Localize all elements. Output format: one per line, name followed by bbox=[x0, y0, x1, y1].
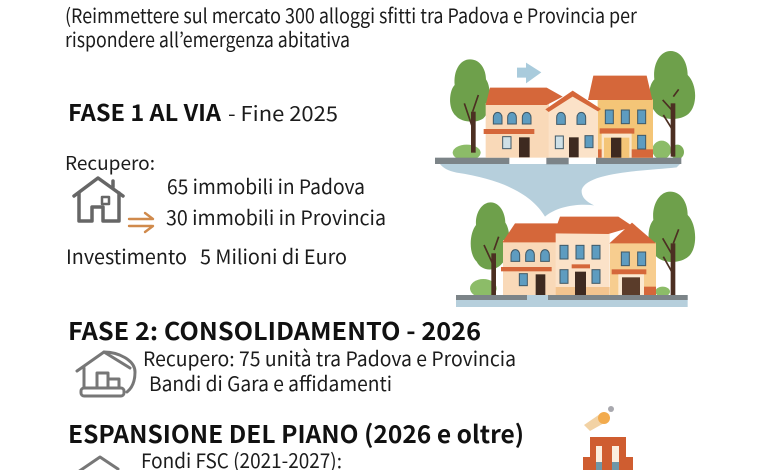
intro text: (Reimmettere sul mercato 300 alloggi sfitti tra Padova e Provincia per bbox=[65, 0, 637, 29]
text: investimento bbox=[66, 241, 347, 270]
icon: building bbox=[583, 437, 633, 470]
icon: coin bbox=[584, 406, 614, 431]
trees bottom bbox=[470, 192, 695, 298]
pavement top bbox=[435, 158, 681, 164]
house top right bbox=[588, 76, 653, 158]
icon: house bbox=[74, 178, 123, 221]
pavement bottom bbox=[456, 295, 688, 307]
house bottom centre bbox=[554, 217, 633, 295]
heading: espansione: ESPANSIONE DEL PIANO (2026 e oltre) bbox=[68, 416, 524, 451]
heading: fase 1: - Fine 2025 bbox=[228, 97, 338, 127]
icon: house with base bbox=[77, 352, 135, 396]
trees top bbox=[450, 51, 695, 161]
text: recupero fase 2 bbox=[143, 343, 516, 397]
icon: house cropped bbox=[78, 457, 118, 470]
heading: fase 1 bbox=[68, 94, 338, 128]
text: investimento: Investimento bbox=[66, 241, 187, 270]
text: recupero fase 2: Recupero: 75 unità tra Padova e Provincia bbox=[143, 343, 516, 372]
text: immobili bbox=[166, 171, 386, 231]
house bottom right bbox=[609, 223, 656, 295]
text: recupero fase 2: Bandi di Gara e affidamenti bbox=[149, 368, 392, 397]
heading: fase 2: FASE 2: CONSOLIDAMENTO - 2026 bbox=[68, 313, 481, 348]
house top centre bbox=[545, 91, 601, 158]
house top left bbox=[484, 88, 563, 158]
heading: fase 1: FASE 1 AL VIA bbox=[68, 94, 221, 128]
illustration: houses bbox=[435, 51, 695, 307]
icon: arrow bbox=[129, 213, 153, 232]
intro text: rispondere all’emergenza abitativa bbox=[65, 24, 350, 53]
text: immobili: 30 immobili in Provincia bbox=[166, 202, 386, 231]
text: investimento: 5 Milioni di Euro bbox=[200, 241, 347, 270]
intro text bbox=[65, 0, 637, 53]
text: immobili: 65 immobili in Padova bbox=[167, 171, 365, 200]
text: recupero label: Recupero: bbox=[65, 149, 155, 176]
connector: road flow bbox=[440, 164, 680, 217]
arrow: small bbox=[517, 63, 541, 83]
house bottom left bbox=[501, 223, 558, 295]
